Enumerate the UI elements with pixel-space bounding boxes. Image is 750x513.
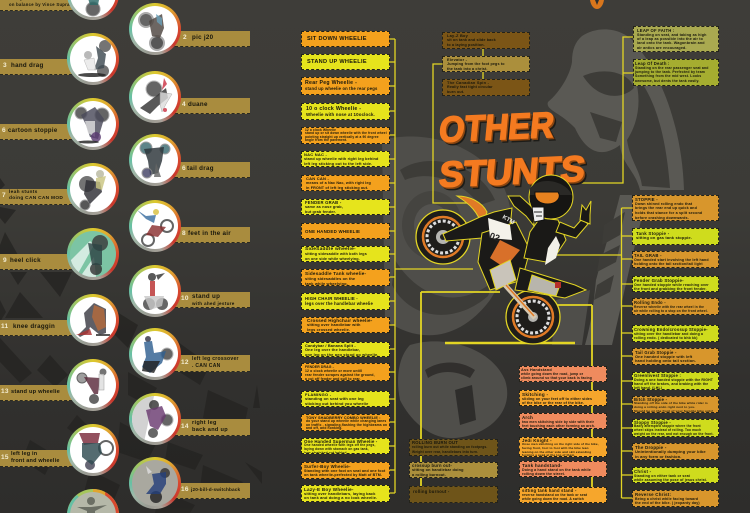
- box: crossed highchair wheelie: [301, 317, 390, 333]
- box: lay-z boy: to a laying position.: [447, 42, 485, 46]
- stunt 3: hand drag: hand drag: [11, 62, 44, 69]
- rider: [508, 175, 591, 265]
- panel: stoppie stunts: [632, 195, 719, 507]
- box: 10 o clock wheelie: [301, 103, 390, 120]
- box: tank handstand: [519, 461, 607, 477]
- stunt 3: hand drag: [0, 33, 119, 85]
- stunt 8: feet in the air: feet in the air: [188, 230, 231, 237]
- box: stoppie: [632, 195, 719, 221]
- number plate: 02: [488, 230, 501, 243]
- box: rolling endo: air while rolling to a stop on the front wheel.: [634, 309, 708, 313]
- box: sit down wheelie: [301, 31, 390, 47]
- stunt 6: tail drag: tail drag: [187, 165, 214, 172]
- box: the canadian spin: The Canadian Spin -: [447, 80, 489, 84]
- stunt 13: stand up wheelie: [0, 359, 119, 411]
- title: other stunts: STUNTS: [439, 149, 588, 196]
- box: stand up wheelie: STAND UP WHEELIE: [307, 59, 367, 65]
- box: bitch stoppie: doing a rolling endo right next to you.: [634, 405, 695, 409]
- box: reverse christ: Reverse Christ:: [635, 492, 671, 496]
- box: lazy-e boy wheelie: on tank and doing a no look wheelie.: [304, 495, 377, 500]
- box: sidesaddle tank wheelie: [301, 269, 390, 286]
- box: leap of faith: [633, 26, 719, 52]
- box: sloppy stoppie: weight on the rear, and not enough on the front.: [634, 432, 714, 436]
- panel: riding stunts: [519, 366, 607, 503]
- box: crowning endo crossup stoppie: rolling endo. ( dedicated to bhb kk): [634, 336, 698, 340]
- box: lazy-e boy wheelie: Lazy-E Boy Wheelie-: [304, 486, 354, 492]
- box: the droppie: [632, 443, 719, 460]
- box: elevator: Jumping from the foot pegs to: [447, 62, 505, 66]
- box: christ: Standing on either tank or seat: [634, 474, 690, 478]
- box: tail grab stoppie: Tail Grab Stoppie -: [635, 350, 677, 354]
- title: other stunts: STUNTS: [437, 148, 587, 195]
- box: surfer-boy wheelie: [301, 462, 390, 479]
- box: 12 o clock wheelie: stand up or sit down wheelie with the front wheel: [305, 131, 387, 135]
- box: tail grab: TAIL GRAB -: [634, 252, 662, 258]
- box: stoppie: brings the rear end up quick and: [635, 206, 697, 210]
- box: flamingo: standing on seat with one leg: [305, 396, 364, 401]
- stunt 1: rodyn stunts: [0, 0, 118, 20]
- box: flamingo: [301, 391, 390, 407]
- box: ass handstand: climb around so that your back is facing: [521, 376, 592, 380]
- box: skitching: sliding on your feet off to either sides: [522, 397, 592, 401]
- box: bitch stoppie: Standing off the side of the bike while rider is: [634, 401, 708, 405]
- stunt 4: duane: [129, 71, 250, 123]
- box: rolling burnout: rolling burnout -: [413, 488, 450, 494]
- stunt 3: hand drag: 3: [3, 62, 7, 69]
- box: leap of faith: air antics are encouraged.: [637, 46, 687, 50]
- box: one handed wheelie: ONE HANDED WHEELIE: [305, 229, 360, 234]
- box: tail grab stoppie: hand holding onto tail section.: [635, 358, 696, 363]
- box: christ: [632, 467, 719, 483]
- box: tony shadberry combo wheelie: [301, 414, 390, 431]
- box: crowning endo crossup stoppie: Crowning Endo/crossup Stoppie-: [634, 326, 708, 332]
- box: skitching: [519, 390, 607, 406]
- stunt 7: leah stunts: doing CAN CAN MOD: [9, 196, 63, 201]
- box: fender grab: but grab fender.: [305, 210, 336, 214]
- box: stoppie: before crashing downwards.: [635, 216, 689, 220]
- box: stand up wheelie: [301, 54, 390, 70]
- box: the droppie: The Droppie -: [635, 444, 667, 450]
- box: reverse christ: Being a christ while facing toward: [635, 496, 698, 500]
- box: fender grab stoppie: One handed stoppie while reaching over: [634, 282, 709, 286]
- box: candybar banana split: Candybar / Banana Split -: [305, 342, 356, 348]
- stunt 7: leah stunts: leah stunts: [9, 190, 38, 195]
- box: one handed superman wheelie: [301, 438, 390, 454]
- box: tank handstand: Doing a hand stand on the tank while: [522, 468, 591, 472]
- box: rolling burn out: [409, 439, 498, 456]
- box: lazy-e boy wheelie: sitting over handlebars, laying back: [304, 490, 376, 496]
- stunt 8: feet in the air: [129, 200, 250, 252]
- box: fender grab: FENDER GRAB -: [305, 200, 342, 204]
- box: reverse christ: the end of the bike. ( jeopardy day): [635, 501, 700, 505]
- box: fender drag: [301, 363, 390, 381]
- stunt 5: cartoon stoppie: 6: [2, 127, 6, 134]
- box: fender grab stoppie: the front and grabbing the front fender.: [634, 287, 707, 291]
- box: bitch stoppie: Should be on the front of your favorite bike only!: [634, 409, 713, 413]
- box: jedi knight: [519, 437, 607, 457]
- box: greenlivest stoppie: [632, 372, 719, 390]
- box: jedi knight: leaning on the other side and skit extending: [522, 450, 591, 454]
- box: tank stoppie: Tank Stoppie -: [636, 230, 669, 236]
- box: tony shadberry combo wheelie: on traffic , signaling,flashing the highbeams on: [306, 423, 387, 427]
- panel: wheelie stunts: [301, 31, 390, 502]
- box: ass handstand: [519, 366, 607, 382]
- box: nac nac: stand up wheelie with right leg behind: [304, 157, 378, 161]
- box: crossed highchair wheelie: sitting over handlebar with: [307, 322, 361, 327]
- box: elevator: Elevator -: [447, 56, 467, 62]
- stunt 9: heel click: heel click: [10, 257, 41, 264]
- box: flamingo: FLAMINGO -: [305, 392, 331, 396]
- box: can can: means of a Nac Nac, with right leg: [306, 181, 371, 185]
- box: reverse christ: [632, 490, 719, 507]
- stunt 4: duane: 4: [182, 101, 186, 108]
- box: 12 o clock wheelie: 12 o clock Wheelie: [305, 128, 336, 132]
- box: sloppy stoppie: [632, 419, 719, 437]
- box: crossup burn out: crossup burn out-: [412, 462, 452, 468]
- box: high chair wheelie: legs over the handlebar wheelie: [305, 301, 373, 306]
- box: jedi knight: facing front, foot to foot with the bike lean: [522, 446, 589, 450]
- box: the canadian spin: Really fast tight circular: [447, 85, 493, 89]
- box: candybar banana split: One leg over the handlebar,: [305, 347, 360, 352]
- stunt 10: stand up with ahed jesture: with ahed jesture: [192, 301, 235, 306]
- box: surfer-boy wheelie: Surfer-Boy Wheelie-: [304, 464, 351, 468]
- box: sidesaddle tank wheelie: siting sidesaddles on the: [305, 276, 355, 280]
- box: lazy-e boy wheelie: [301, 485, 390, 502]
- box: leap of faith: LEAP OF FAITH :: [637, 28, 675, 32]
- box: tail grab: holding onto the tail section/tail light: [634, 262, 703, 266]
- box: tony shadberry combo wheelie: TONY SHADBERRY COMBO WHEELIE :: [306, 416, 381, 420]
- background: checkered flag: [0, 178, 262, 512]
- box: sidesaddle wheelie: SideSaddle wheelie-: [305, 246, 356, 252]
- stunt 5: cartoon stoppie: [0, 98, 119, 150]
- stunt 5: cartoon stoppie: cartoon stoppie: [8, 128, 58, 134]
- stunt 10: stand up with ahed jesture: stand up: [192, 293, 220, 300]
- box: nac nac: [301, 151, 390, 167]
- box: arch: [519, 413, 607, 429]
- box: rolling burn out: Weight over rear, handlebars into turn.: [412, 450, 478, 454]
- box: nac nac: left leg sticking out to the left side.: [304, 162, 372, 166]
- box: rolling endo: Rolling Endo -: [634, 300, 666, 304]
- box: skitching: Skitching -: [522, 392, 548, 396]
- box: jedi knight: Jedi Knight -: [522, 438, 552, 442]
- title: other stunts: STUNTS: [440, 151, 590, 198]
- box: one handed wheelie: [301, 223, 390, 239]
- box: crossup burn out: a rolling burnout.: [412, 473, 446, 477]
- panel: leap stunts: [633, 26, 719, 86]
- stunt 7: leah stunts: [0, 163, 119, 215]
- box: leap of death: Something from the mid west. Looks: [635, 74, 701, 78]
- panel: burnout stunts: [409, 439, 498, 503]
- box: fender grab: [301, 199, 390, 215]
- box: crossed highchair wheelie: Crossed Highchair wheelie-: [307, 318, 372, 322]
- box: tail grab stoppie: One handed stoppie with left: [635, 354, 692, 358]
- stunt 10: stand up with ahed jesture: [129, 265, 250, 317]
- box: surfer-boy wheelie: on tank wheelie-perfected by Matt of BTM.: [304, 473, 382, 477]
- stunt 13: stand up wheelie: 13: [1, 388, 9, 395]
- box: rear peg wheelie: Rear Peg Wheelie -: [305, 80, 357, 86]
- box: surfer-boy wheelie: Standing with one foot on seat and one foot: [304, 468, 385, 472]
- box: greenlivest stoppie: hand off the brakes, and braking with the: [634, 382, 708, 386]
- box: 10 o clock wheelie: 10 o clock Wheelie -: [306, 106, 361, 112]
- stunt 2: pic j20: pic j20: [192, 34, 213, 41]
- box: bitch stoppie: Bitch Stoppie -: [634, 396, 667, 402]
- stunt 12: left leg crossover can can: [129, 328, 250, 380]
- box: rolling endo: [632, 298, 719, 315]
- box: leap of death: awesome, but dents the tank easily.: [635, 79, 700, 83]
- stunt 11: knee draggin: [0, 294, 119, 346]
- stunt 9: heel click: 9: [3, 257, 7, 264]
- stunt 10: stand up with ahed jesture: 10: [181, 295, 189, 302]
- box: greenlivest stoppie: Doing a one handed stoppie with the RIGHT: [634, 378, 713, 382]
- box: tail grab: [632, 251, 719, 268]
- box: sidesaddle tank wheelie: tank while wheelying.: [305, 280, 348, 286]
- stunt 16: j20-bill-d-switchback: 16: [181, 486, 189, 493]
- stunt 9: heel click: [0, 228, 119, 280]
- box: arch: feet touching each other forming an arch.: [522, 424, 595, 428]
- box: sidesaddle wheelie: on one side while wheelying.: [305, 257, 360, 261]
- bike body: [443, 196, 586, 318]
- stunt 2: pic j20: 2: [183, 34, 187, 41]
- stunt 1: rodyn stunts: on balance by Vince Supra: [9, 2, 70, 7]
- stunt 15: left leg in front and wheelie: [0, 424, 119, 476]
- box: one handed superman wheelie: One handed wheelie with legs off the pegs,: [304, 443, 375, 447]
- box: 12 o clock wheelie: pointing straight up vertically at a 90 degree: [305, 135, 379, 139]
- box: 10 o clock wheelie: Wheelie with nose at 10oclock.: [306, 112, 375, 116]
- stunt 2: pic j20: [129, 3, 250, 55]
- box: tank stoppie: sitting on gas tank stoppie.: [636, 235, 692, 240]
- box: jedi knight: three men skitching on the right side of the bike,: [522, 442, 599, 446]
- box: leap of death: jumping to the tank. Perfected by team: [635, 70, 705, 74]
- box: high chair wheelie: HIGH CHAIR WHEELIE -: [305, 296, 358, 300]
- icon: top logo: [590, 0, 604, 9]
- box: sloppy stoppie: Badly attempted stoppie where the front: [634, 424, 701, 428]
- box: candybar banana split: one leg on the peg stood up wheelie.: [305, 352, 378, 356]
- box: tony shadberry combo wheelie: and off, and honking.: [306, 426, 342, 430]
- box: rolling endo: Reverse wheelie with the rear wheel in the: [634, 304, 704, 308]
- box: high chair wheelie: [301, 293, 390, 310]
- box: tail grab stoppie: [632, 348, 719, 365]
- stunt 14: right leg back and up: back and up: [192, 427, 228, 433]
- box: lay-z boy: Lay-Z Boy: [447, 32, 468, 38]
- stunt 15: left leg in front and wheelie: 15: [1, 454, 9, 461]
- box: crossed highchair wheelie: legs crossed wheelie.: [307, 327, 350, 332]
- box: the droppie: Unintentionally dumping your bike: [635, 449, 706, 454]
- front wheel: [416, 210, 470, 264]
- box: flamingo: sticking out behind you wheelie: [305, 401, 368, 406]
- box: leap of faith: Standing on seat, and taking as high: [637, 32, 707, 36]
- box: sloppy stoppie: wheel skips instead of rolling. Too much: [634, 428, 701, 432]
- box: christ: Christ -: [634, 468, 651, 474]
- box: rolling burnout: [409, 486, 498, 503]
- box: stoppie: STOPPIE -: [635, 196, 658, 202]
- box: sitting tank hand stand: while going down the road. A switch: [522, 497, 584, 501]
- box: fender grab stoppie: Fender Grab Stoppie-: [634, 278, 684, 282]
- stunt 4: duane: duane: [188, 101, 208, 108]
- box: sloppy stoppie: Sloppy Stoppie -: [634, 420, 671, 424]
- box: ass handstand: Ass Handstand: [521, 368, 552, 372]
- box: sit down wheelie: SIT DOWN WHEELIE: [307, 36, 367, 42]
- stunt 11: knee draggin: 11: [1, 323, 8, 330]
- stunt 16: j20-bill-d-switchback: [129, 457, 250, 509]
- stunt 6: tail drag: [129, 134, 250, 186]
- stunt 16: j20-bill-d-switchback: j20-bill-d-switchback: [191, 487, 240, 492]
- box: 12 o clock wheelie: angle from the pavement.: [305, 138, 347, 142]
- stunt 7: leah stunts: 7: [2, 192, 6, 199]
- box: can can: in FRONT of left leg sticking out.: [306, 186, 368, 190]
- box: the droppie: in any form or fashion.: [635, 454, 682, 458]
- stunt 8: feet in the air: 8: [182, 230, 186, 237]
- box: fender drag: rear fender scrapes against the ground,: [305, 372, 375, 376]
- stunt 12: left leg crossover can can: 12: [181, 359, 189, 366]
- box: rear peg wheelie: [301, 77, 390, 95]
- stunt 17: cropped circle: [67, 489, 119, 513]
- box: tank stoppie: [632, 228, 719, 245]
- box: ass handstand: while going down the road, jump or: [521, 372, 583, 376]
- box: stoppie: Down shined rolling endo that: [635, 202, 692, 206]
- box: fender drag: FENDER DRAG -: [305, 364, 334, 368]
- box: nac nac: NAC NAC -: [304, 152, 327, 156]
- box: 12 o clock wheelie: [301, 127, 390, 144]
- title: other stunts: OTHER: [439, 105, 557, 151]
- box: crowning endo crossup stoppie: sitting over the handlebar and doing a: [634, 332, 703, 336]
- title: other stunts: [437, 105, 590, 198]
- box: rolling burn out: ROLLING BURN OUT: [412, 440, 458, 444]
- box: stoppie: holds that stance for a split second: [635, 211, 702, 215]
- stunt 13: stand up wheelie: stand up wheelie: [11, 389, 60, 395]
- box: arch: Arch: [522, 414, 533, 420]
- box: sitting tank hand stand: reverse handstand on the tank or seat: [522, 493, 587, 497]
- box: fender grab stoppie: [632, 276, 719, 292]
- stunt 12: left leg crossover can can: left leg crossover: [192, 356, 239, 362]
- box: can can: CAN CAN -: [306, 176, 329, 180]
- box: tony shadberry combo wheelie: do your stand up wheelie while changing lanes: [306, 419, 386, 423]
- stunt 14: right leg back and up: right leg: [192, 420, 217, 426]
- box: rear peg wheelie: stand up wheelie on the rear pegs: [305, 86, 377, 91]
- box: greenlivest stoppie: Greenlivest Stoppie :: [634, 372, 681, 378]
- box: leap of death: Leap Of Death :: [635, 60, 670, 66]
- box: crowning endo crossup stoppie: [632, 325, 719, 342]
- stunt 11: knee draggin: knee draggin: [13, 323, 55, 330]
- box: fender grab: same as nose grab,: [305, 205, 343, 209]
- box: sitting tank hand stand: [519, 487, 607, 503]
- illustration: rider on dirt bike doing a wheelie: [415, 174, 592, 345]
- box: one handed superman wheelie: One Handed Superman Wheelie -: [304, 438, 377, 444]
- stunt 14: right leg back and up: [129, 393, 250, 445]
- box: arch: two men skitching side by side with their: [522, 420, 594, 424]
- box: can can: [301, 175, 390, 191]
- box: tail grab: One handed start involving the left hand: [634, 258, 709, 262]
- box: rolling burn out: rolling burn out while standing on footpegs.: [412, 445, 487, 449]
- box: elevator: the tank into a christ.: [447, 66, 488, 70]
- box: sidesaddle tank wheelie: Sidesaddle Tank wheelie-: [305, 270, 366, 276]
- box: lay-z boy: sit on tank and slide back: [447, 38, 496, 42]
- box: crossup burn out: sitting on handlebar doing: [412, 468, 464, 472]
- stunt 14: right leg back and up: 14: [181, 423, 189, 430]
- box: lay-z boy: [442, 32, 530, 49]
- rear wheel: [506, 290, 560, 344]
- box: fender drag: a cut off fender and pull to rear.: [305, 376, 361, 380]
- box: leap of death: [633, 59, 719, 86]
- box: sitting tank hand stand: sitting tank hand stand -: [522, 488, 577, 492]
- box: tank handstand: Tank handstand-: [522, 462, 562, 468]
- box: leap of death: Standing on the rear passenger seat and: [635, 66, 709, 70]
- illustration: rider on dirt bike doing a wheelie: KTM: [501, 215, 515, 226]
- box: skitching: of the bike or the rear of the bike.: [522, 401, 584, 405]
- box: leap of faith: land onto the tank. Wagonbrain and: [637, 41, 705, 45]
- box: bitch stoppie: [632, 396, 719, 413]
- title: other stunts: OTHER: [440, 107, 559, 153]
- stunt 15: left leg in front and wheelie: front and wheelie: [11, 458, 60, 464]
- box: sidesaddle wheelie: [301, 246, 390, 262]
- box: christ: while assuming the pose of jesus christ.: [634, 478, 707, 482]
- stunt 6: tail drag: 6: [182, 165, 186, 172]
- box: the canadian spin: burn out.: [447, 90, 464, 94]
- box: elevator: [442, 56, 530, 72]
- panel: tank stunts: [442, 32, 530, 96]
- stunt 15: left leg in front and wheelie: left leg in: [11, 451, 37, 457]
- box: one handed superman wheelie: laying down with stomach on gas tank,: [304, 447, 369, 451]
- box: candybar banana split: [301, 342, 390, 357]
- box: tank handstand: rolling down the street.: [522, 472, 565, 476]
- box: fender drag: 12 o clock wheelie or more untill: [305, 368, 362, 372]
- box: the canadian spin: [442, 79, 530, 96]
- box: sidesaddle wheelie: sitting sidesaddle with both legs: [305, 252, 367, 256]
- stunt 12: left leg crossover can can: . CAN CAN: [192, 363, 221, 369]
- box: leap of faith: of a leap as possible into the air to: [637, 37, 703, 41]
- box: crossup burn out: [409, 462, 498, 478]
- background: skull and skeleton artwork: [382, 30, 684, 438]
